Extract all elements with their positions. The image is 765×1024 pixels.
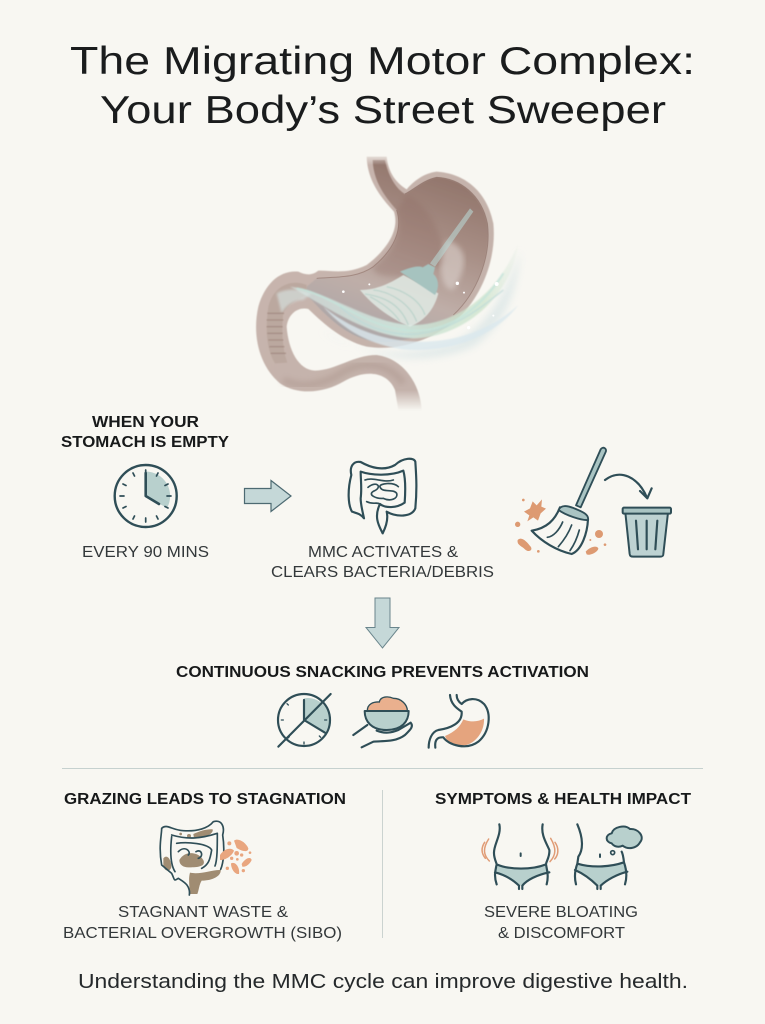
title: Your Body’s Street Sweeper [100,89,666,132]
heading: symptoms: SYMPTOMS & HEALTH IMPACT [435,791,692,808]
icon: clock [115,465,177,527]
icon: intestines [349,459,416,533]
label: every 90 mins: EVERY 90 MINS [82,544,209,561]
swoosh [290,243,518,350]
trash can [625,513,668,557]
label: mmc activates: MMC ACTIVATES & [308,544,459,561]
arrow: down [366,598,399,648]
tube shading [283,365,403,385]
soft shadow [320,250,520,358]
icon: discomfort belly with thought cloud [575,824,642,889]
broom collar [559,506,588,520]
divider [62,768,703,770]
heading: continuous snacking: CONTINUOUS SNACKING PREVENTS ACTIVATION [176,664,589,681]
duodenum folds [267,313,286,353]
footer text: Understanding the MMC cycle can improve digestive health. [78,971,688,993]
icon: stagnant intestine with bacteria [160,821,252,895]
curved arrow [605,475,652,498]
broom bristles [532,507,588,554]
icon: bloated belly [482,824,558,889]
heading: grazing: GRAZING LEADS TO STAGNATION [64,791,346,808]
label: severe bloating: SEVERE BLOATING [484,904,638,921]
icon: crossed clock [278,694,331,747]
title [70,40,695,132]
sparkles [342,282,499,329]
icon: broom and trash can [515,448,671,557]
label: severe bloating: & DISCOMFORT [498,925,626,942]
label: stagnant waste: STAGNANT WASTE & [118,904,289,921]
stomach lumen including esophagus [305,160,488,342]
label: stagnant waste: BACTERIAL OVERGROWTH (SIBO) [63,925,342,942]
label: stagnant waste [63,904,342,942]
heading: when your stomach is empty [61,414,230,451]
label: mmc activates: CLEARS BACTERIA/DEBRIS [271,564,494,581]
heading: when your stomach is empty: WHEN YOUR [92,414,199,431]
broom bristles [360,275,438,327]
broom handle [576,448,606,507]
heading: when your stomach is empty: STOMACH IS EMPTY [61,434,230,451]
title: The Migrating Motor Complex: [70,40,695,83]
esophagus and lower fades [360,150,397,165]
broom head [400,264,438,295]
icon: hand holding bowl of food [353,697,412,747]
duodenum lumen [267,283,307,363]
debris [515,499,606,555]
illustration: stomach with broom [256,150,520,411]
lumen rim [405,177,488,315]
broom handle [430,208,473,267]
label: mmc activates [271,544,494,581]
icon: stomach filled with food [429,695,489,748]
arrow: right [244,480,291,512]
label: severe bloating [484,904,638,942]
stomach and duodenum wall [256,157,494,410]
